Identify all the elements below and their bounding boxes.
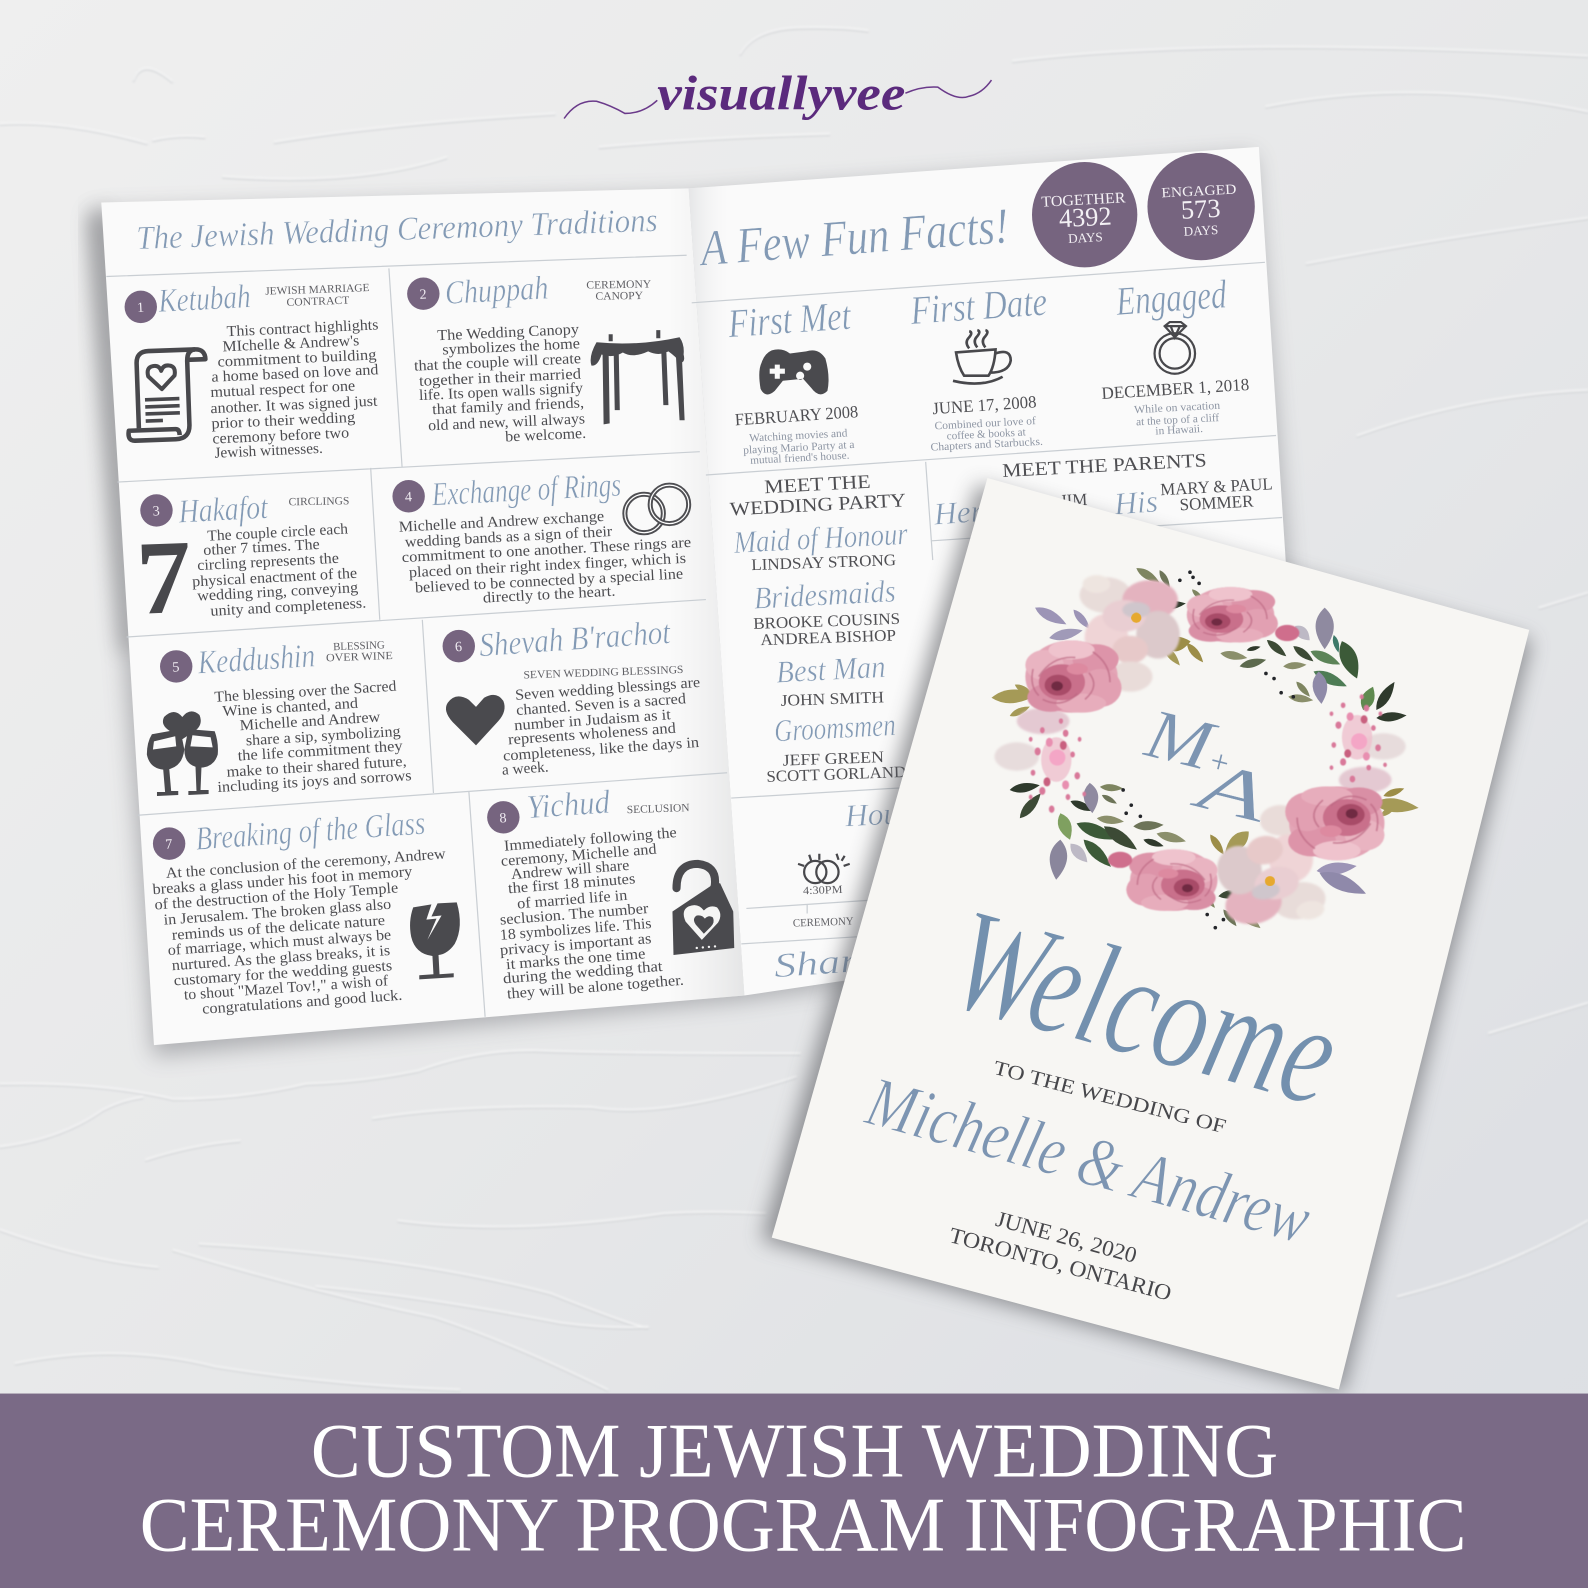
section 8: Yichud: of married life in — [516, 887, 628, 912]
section 3: Hakafot: CIRCLINGS — [288, 495, 349, 508]
section 1: Ketubah: another. It was signed just — [210, 393, 379, 417]
section: hours timeline: 4:30PM — [803, 884, 843, 897]
section 3: Hakafot: The couple circle each — [207, 520, 349, 545]
peonies — [1025, 587, 1384, 911]
section 8: Yichud: SECLUSION — [627, 802, 690, 816]
section 6: Shevah B'rachot: Seven wedding blessings are — [515, 674, 701, 704]
fact: first date — [908, 279, 1049, 454]
section 5: Keddushin: make to their shared future, — [226, 753, 407, 781]
section 8: Yichud: they will be alone together. — [506, 972, 684, 1003]
icon: small rings — [798, 854, 850, 883]
badge: engaged days: ENGAGED — [1161, 182, 1237, 201]
section 4: Exchange of Rings: Michelle and Andrew exchange — [398, 508, 605, 536]
fact: first date: First Date — [908, 279, 1049, 333]
section 2: Chuppah: life. Its open walls signify — [419, 380, 584, 404]
section: meet the wedding party: Maid of Honour — [732, 516, 909, 560]
fact: first met: FEBRUARY 2008 — [734, 402, 859, 429]
section: meet the parents — [932, 450, 1273, 532]
fact: first met — [726, 293, 859, 467]
section 8: Yichud: privacy is important as — [499, 930, 652, 959]
section 1: Ketubah: a home based on love and — [211, 361, 379, 386]
section 8: Yichud: ceremony, Michelle and — [500, 841, 658, 870]
badge: together days: TOGETHER — [1041, 189, 1127, 211]
icon: chuppah canopy — [591, 330, 685, 424]
section 5: Keddushin: BLESSING — [333, 639, 385, 653]
section 6: Shevah B'rachot: SEVEN WEDDING BLESSINGS — [523, 664, 684, 682]
section 7: Breaking of the Glass: congratulations and good luck. — [202, 987, 403, 1018]
monogram: M + A: A — [1185, 745, 1276, 838]
section 8: Yichud: seclusion. The number — [499, 900, 649, 929]
section: meet the wedding party: Bridesmaids — [753, 573, 896, 616]
section: meet the wedding party — [729, 472, 909, 786]
logo: visuallyvee — [564, 66, 991, 120]
heading: a few fun facts: A Few Fun Facts! — [696, 197, 1011, 277]
section 7: Breaking of the Glass: At the conclusion of the ceremony, Andrew — [165, 846, 446, 882]
fact: engaged: While on vacation — [1134, 400, 1221, 416]
icon: game controller — [759, 349, 829, 395]
pink sprigs — [1029, 625, 1387, 868]
section 8: Yichud: Andrew will share — [510, 857, 630, 883]
section 7: Breaking of the Glass: to shout "Mazel Tov!," a wish of — [183, 972, 390, 1004]
section 7: Breaking of the Glass: reminds us of the delicate nature — [171, 912, 386, 944]
banner — [0, 1394, 1588, 1588]
section 4: Exchange of Rings: wedding bands as a sign of their — [404, 523, 613, 551]
cover date: JUNE 26, 2020 — [993, 1206, 1140, 1268]
panel: front cover — [772, 478, 1529, 1390]
badge: together days: DAYS — [1068, 229, 1103, 246]
section 5: Keddushin: Keddushin — [196, 637, 316, 682]
cover heading: welcome: Welcome — [935, 876, 1355, 1138]
section 5: Keddushin: Wine is chanted, and — [222, 695, 359, 720]
icon: diamond ring — [1155, 322, 1195, 374]
section: meet the wedding party: Groomsmen — [773, 707, 896, 748]
section 8: Yichud: it marks the one time — [505, 945, 646, 973]
section 1: Ketubah: mutual respect for one — [210, 377, 356, 401]
section 1: Ketubah: prior to their wedding — [211, 409, 356, 432]
section 6: Shevah B'rachot: chanted. Seven is a sacred — [516, 690, 687, 719]
icon: broken glass — [410, 902, 460, 979]
section 4: Exchange of Rings: 4 — [404, 489, 412, 505]
badge: engaged days: 573 — [1180, 194, 1221, 225]
section 7: Breaking of the Glass — [152, 805, 460, 1018]
section 5: Keddushin: share a sip, symbolizing — [245, 723, 401, 749]
icon: number seven: 7 — [134, 518, 193, 637]
section: meet the parents: His — [1112, 484, 1159, 522]
section 3: Hakafot: wedding ring, conveying — [197, 579, 359, 605]
section 7: Breaking of the Glass: nurtured. As the glass breaks, it is — [171, 942, 391, 974]
section 2: Chuppah: together in their married — [419, 366, 582, 390]
badge: together days: 4392 — [1058, 201, 1112, 233]
logo: visuallyvee: visuallyvee — [657, 66, 905, 120]
section 3: Hakafot — [134, 489, 367, 637]
section 4: Exchange of Rings: directly to the heart. — [482, 583, 616, 607]
section 2: Chuppah: symbolizes the home — [442, 335, 581, 358]
section 6: Shevah B'rachot — [443, 614, 701, 779]
fact: first met: Watching movies and — [749, 427, 848, 445]
section 1: Ketubah: commitment to building — [217, 346, 377, 371]
section: meet the wedding party: WEDDING PARTY — [729, 490, 907, 520]
section 3: Hakafot: unity and completeness. — [210, 595, 367, 620]
fact: first met: First Met — [726, 293, 853, 346]
section 6: Shevah B'rachot: a week. — [501, 759, 549, 779]
floral wreath — [991, 565, 1419, 934]
section 2: Chuppah: CANOPY — [595, 290, 643, 303]
section: hours timeline: Share — [773, 940, 876, 985]
cover text: to the wedding of: TO THE WEDDING OF — [991, 1057, 1228, 1138]
section 6: Shevah B'rachot: 6 — [454, 639, 463, 655]
section 2: Chuppah: Chuppah — [444, 269, 549, 312]
blossom centres — [1131, 613, 1275, 886]
section 2: Chuppah: CEREMONY — [586, 279, 651, 292]
cover names: Michelle & Andrew — [858, 1062, 1319, 1259]
section 1: Ketubah: CONTRACT — [286, 295, 350, 309]
section: meet the wedding party: SCOTT GORLAND — [766, 763, 907, 786]
section 3: Hakafot: other 7 times. The — [203, 536, 320, 559]
section 2: Chuppah: 2 — [419, 287, 427, 303]
section 6: Shevah B'rachot: represents wholeness and — [507, 720, 677, 748]
icon: wedding rings — [625, 485, 689, 533]
section 7: Breaking of the Glass: breaks a glass under his foot in memory — [152, 863, 413, 898]
cover location: TORONTO, ONTARIO — [947, 1222, 1174, 1306]
section: meet the wedding party: ANDREA BISHOP — [760, 626, 896, 649]
fact: first date: JUNE 17, 2008 — [932, 392, 1037, 418]
icon: wine glasses — [147, 711, 218, 796]
panel: open program, left page — [101, 188, 744, 1045]
fact: first date: Chapters and Starbucks. — [930, 436, 1043, 454]
section 5: Keddushin: 5 — [172, 659, 180, 676]
section 5: Keddushin: including its joys and sorrows — [217, 767, 412, 796]
section: meet the wedding party: JOHN SMITH — [780, 688, 885, 710]
section: meet the wedding party: Best Man — [775, 649, 886, 690]
section 6: Shevah B'rachot: completeness, like the days in — [502, 734, 700, 765]
badge: engaged days — [1147, 153, 1255, 260]
section 5: Keddushin: Michelle and Andrew — [239, 709, 381, 734]
grid lines — [106, 255, 727, 1017]
section 7: Breaking of the Glass: 7 — [165, 836, 173, 853]
section 2: Chuppah: old and new, will always — [428, 410, 585, 434]
fact: engaged — [1101, 271, 1250, 437]
badge: together days — [1032, 162, 1137, 267]
section 7: Breaking of the Glass: Breaking of the Glass — [194, 805, 426, 858]
section 3: Hakafot: Hakafot — [177, 489, 269, 531]
fact: first met: playing Mario Party at a — [743, 439, 855, 457]
section 1: Ketubah: ceremony before two — [212, 424, 350, 448]
section 6: Shevah B'rachot: Shevah B'rachot — [478, 614, 672, 664]
pale blossoms — [995, 575, 1406, 934]
section 2: Chuppah: that family and friends, — [432, 394, 584, 418]
fact: first met: mutual friend's house. — [750, 450, 850, 467]
section 1: Ketubah — [125, 278, 379, 462]
section 7: Breaking of the Glass: in Jerusalem. The broken glass also — [163, 896, 392, 929]
monogram: M + A: + — [1204, 743, 1234, 783]
section: meet the parents: SOMMER — [1179, 492, 1254, 514]
section: meet the parents: Her — [932, 493, 985, 532]
monogram: M + A — [1137, 694, 1276, 838]
booklet shadow — [87, 155, 1307, 1056]
section: hours timeline: Hours — [843, 794, 924, 833]
fact: engaged: Engaged — [1114, 271, 1228, 324]
banner title line 2: CEREMONY PROGRAM INFOGRAPHIC — [140, 1482, 1466, 1568]
section 3: Hakafot: 3 — [152, 503, 160, 520]
section 1: Ketubah: JEWISH MARRIAGE — [265, 282, 370, 298]
section 8: Yichud: 8 — [499, 810, 507, 827]
section 4: Exchange of Rings: commitment to one another. These rings are — [401, 534, 692, 566]
section 8: Yichud: Immediately following the — [503, 824, 678, 855]
icon: coffee cup — [953, 330, 1011, 384]
title: traditions: The Jewish Wedding Ceremony Traditions — [136, 202, 658, 257]
fact: engaged: DECEMBER 1, 2018 — [1101, 375, 1250, 403]
section: hours timeline — [773, 794, 924, 985]
section: meet the wedding party: BROOKE COUSINS — [753, 610, 900, 633]
section: meet the parents: MEET THE PARENTS — [1002, 450, 1207, 482]
section: hours timeline: CEREMONY — [793, 916, 854, 930]
section 7: Breaking of the Glass: customary for the wedding guests — [173, 957, 393, 989]
leaves — [991, 565, 1419, 932]
icon: heart — [446, 695, 505, 745]
section: meet the wedding party: MEET THE — [764, 472, 871, 498]
section 8: Yichud — [487, 784, 734, 1003]
section 3: Hakafot: circling represents the — [197, 550, 340, 574]
panel: open program, right page — [689, 147, 1308, 996]
section 8: Yichud: the first 18 minutes — [507, 870, 636, 897]
section 1: Ketubah: This contract highlights — [226, 316, 379, 340]
icon: scroll — [126, 349, 208, 441]
section 4: Exchange of Rings — [392, 466, 692, 607]
section 4: Exchange of Rings: placed on their right index finger, which is — [408, 550, 687, 581]
section 5: Keddushin: the life commitment they — [237, 737, 403, 765]
section 8: Yichud: 18 symbolizes life. This — [499, 915, 652, 944]
section 4: Exchange of Rings: Exchange of Rings — [430, 466, 622, 513]
section 1: Ketubah: MIchelle & Andrew's — [222, 332, 360, 355]
fact: engaged: at the top of a cliff — [1136, 412, 1220, 428]
section 1: Ketubah: Ketubah — [157, 278, 251, 320]
section 2: Chuppah: The Wedding Canopy — [437, 321, 580, 344]
section: meet the wedding party: JEFF GREEN — [782, 748, 885, 770]
monogram: M + A: M — [1137, 694, 1224, 787]
section: meet the parents: MARY & PAUL — [1160, 474, 1273, 499]
section 6: Shevah B'rachot: number in Judaism as it — [514, 706, 672, 734]
cover shadow — [762, 484, 1531, 1394]
section 2: Chuppah: be welcome. — [505, 425, 586, 446]
section 4: Exchange of Rings: believed to be connected by a special line — [415, 565, 684, 596]
section 8: Yichud: Yichud — [526, 784, 611, 826]
section 5: Keddushin: OVER WINE — [326, 650, 393, 664]
banner title line 1: CUSTOM JEWISH WEDDING — [311, 1408, 1278, 1494]
grid lines — [692, 262, 1282, 944]
section 1: Ketubah: Jewish witnesses. — [214, 440, 323, 462]
section: meet the wedding party: LINDSAY STRONG — [751, 551, 897, 574]
section 2: Chuppah — [407, 269, 685, 446]
icon: door hanger — [672, 864, 734, 955]
section: meet the parents: ANN & JIM — [1002, 490, 1088, 513]
fact: first date: coffee & books at — [946, 426, 1027, 443]
section 3: Hakafot: physical enactment of the — [192, 565, 358, 590]
fact: first date: Combined our love of — [934, 415, 1036, 432]
section 7: Breaking of the Glass: of marriage, which must always be — [167, 926, 392, 959]
section 7: Breaking of the Glass: of the destruction of the Holy Temple — [154, 879, 399, 913]
section 8: Yichud: during the wedding that — [502, 958, 664, 987]
berries — [1121, 570, 1295, 930]
section 5: Keddushin — [147, 637, 412, 796]
section 5: Keddushin: The blessing over the Sacred — [214, 678, 397, 706]
section 2: Chuppah: that the couple will create — [414, 350, 582, 375]
section 1: Ketubah: 1 — [137, 300, 145, 316]
fact: engaged: in Hawaii. — [1155, 423, 1203, 437]
badge: engaged days: DAYS — [1183, 222, 1219, 239]
